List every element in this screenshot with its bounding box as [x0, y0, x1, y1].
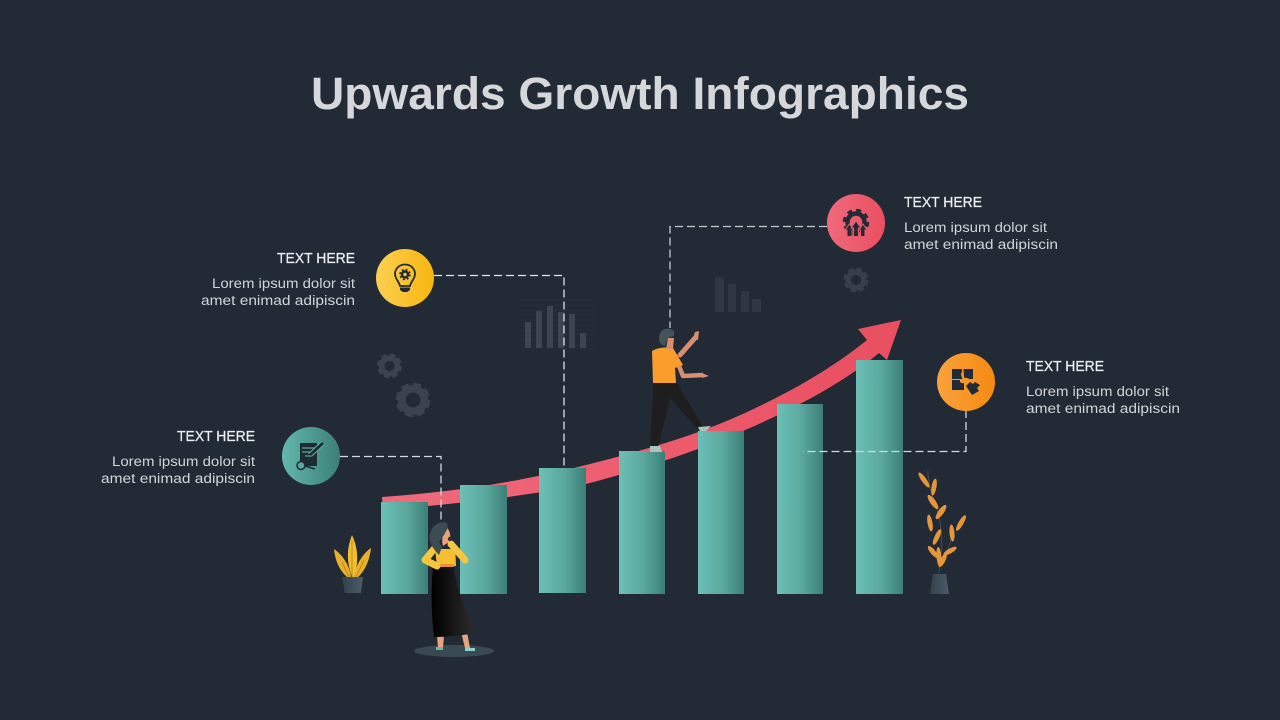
text block: orange callout: Lorem ipsum dolor sit [1026, 384, 1169, 399]
text block: red callout: TEXT HERE [904, 194, 982, 211]
callout: yellow, left top [201, 249, 434, 308]
text block: red callout: Lorem ipsum dolor sit [904, 220, 1047, 235]
text block: teal callout [101, 428, 255, 486]
text block: yellow callout: amet enimad adipiscin [201, 293, 355, 308]
text block: yellow callout: Lorem ipsum dolor sit [212, 276, 355, 291]
background faint bar chart right [715, 277, 761, 312]
figure: woman [414, 522, 494, 657]
text block: yellow callout [201, 250, 355, 308]
plant: orange [917, 470, 968, 594]
title: Upwards Growth Infographics [311, 68, 969, 119]
callout: orange, right [937, 353, 1180, 416]
text block: yellow callout: TEXT HERE [277, 250, 355, 267]
background gear right [845, 269, 867, 291]
icon: gear with up arrows [827, 194, 885, 252]
text block: red callout: amet enimad adipiscin [904, 237, 1058, 252]
text block: teal callout: TEXT HERE [177, 428, 255, 445]
text block: teal callout: Lorem ipsum dolor sit [112, 454, 255, 469]
plant: yellow [334, 535, 371, 593]
text block: red callout [904, 194, 1058, 252]
background faint bar chart center [519, 300, 595, 349]
bar chart [381, 360, 903, 594]
text block: orange callout [1026, 358, 1180, 416]
text block: orange callout: amet enimad adipiscin [1026, 401, 1180, 416]
figure: man [650, 329, 711, 452]
background gears left [378, 355, 428, 416]
icon: document with pen and key [282, 427, 340, 485]
growth arrow [382, 320, 901, 510]
icon: puzzle pieces [937, 353, 995, 411]
dashed connectors [340, 226, 966, 522]
callout: red, top right [827, 194, 1058, 252]
icon: light bulb with gear [376, 249, 434, 307]
text block: teal callout: amet enimad adipiscin [101, 471, 255, 486]
text block: orange callout: TEXT HERE [1026, 358, 1104, 375]
callout: teal, left bottom [101, 427, 340, 486]
